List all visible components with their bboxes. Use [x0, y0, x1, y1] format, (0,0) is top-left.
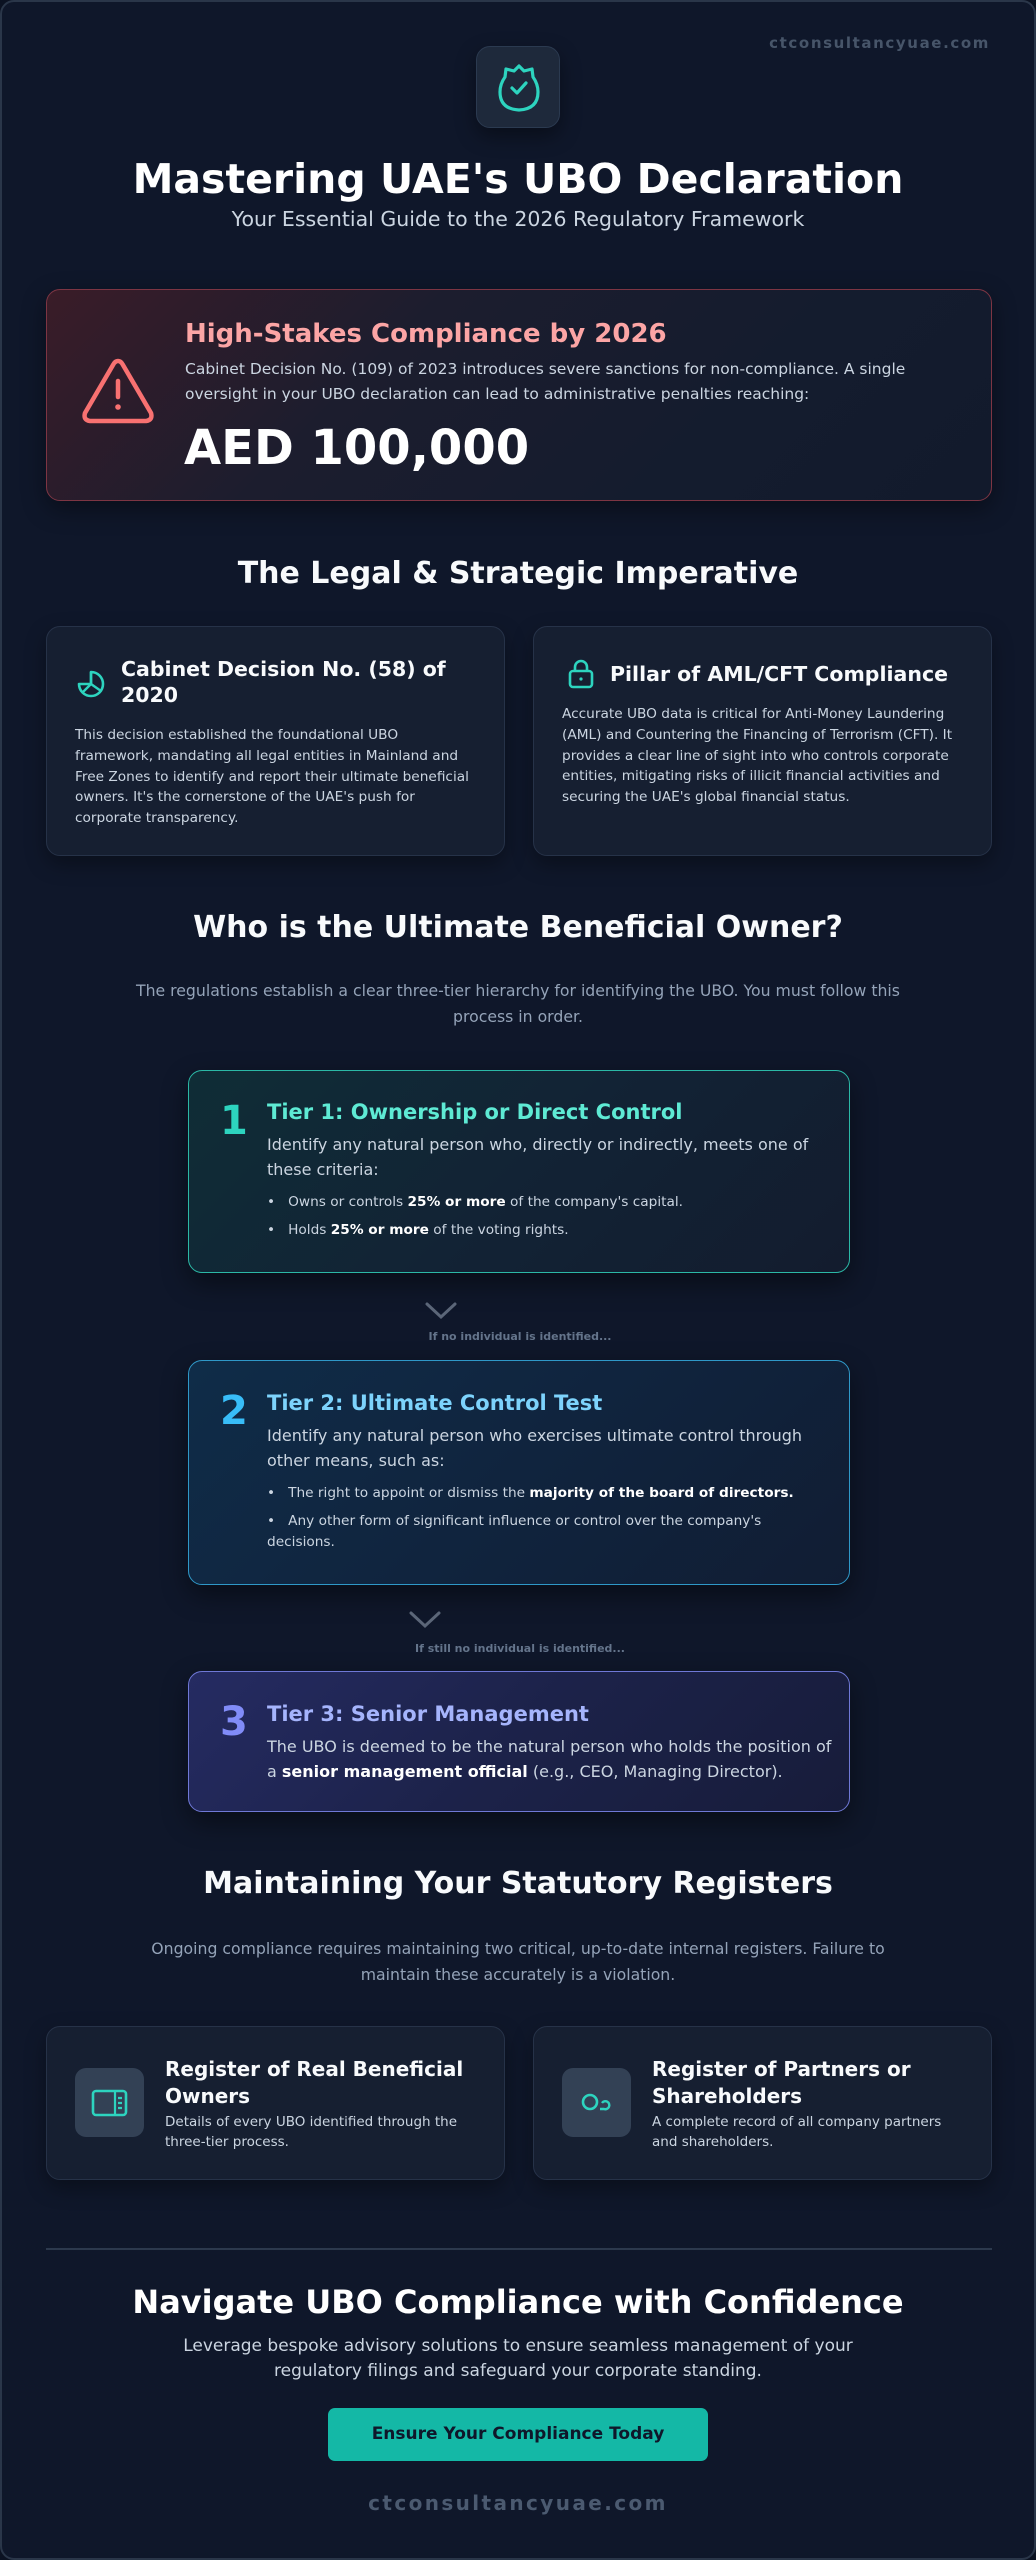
intro: registers: maintain these accurately is a violation.	[361, 1965, 675, 1984]
heading: Pillar of AML/CFT Compliance	[610, 662, 948, 686]
panel: register partners	[533, 2026, 992, 2180]
heading: registers: Maintaining Your Statutory Registers	[203, 1866, 833, 1901]
icon: pie	[78, 670, 104, 698]
tier 1 text	[267, 1100, 809, 1238]
tier 3 text	[266, 1702, 832, 1781]
body: This decision established the foundational UBO framework, mandating all legal entities in Mainland and Free Zones to identify and report their ultimate beneficial owners. It's the cornerstone of the UAE's push for corporate transparency.	[75, 727, 469, 826]
panel: alert	[46, 289, 992, 501]
heading: Cabinet Decision No. (58) of 2020	[121, 657, 446, 707]
CTA text: Leverage bespoke advisory solutions to ensure seamless management of your	[183, 2336, 853, 2356]
tier 1 text: • Holds 25% or more of the voting rights.	[267, 1222, 569, 1238]
tier 2 text	[267, 1391, 802, 1550]
tier 2 text: Tier 2: Ultimate Control Test	[267, 1391, 602, 1415]
heading: who is UBO: Who is the Ultimate Beneficial Owner?	[193, 910, 843, 945]
alert body	[185, 360, 905, 403]
register body: and shareholders.	[652, 2134, 773, 2150]
tier 1 text: • Owns or controls 25% or more of the company's capital.	[267, 1194, 683, 1210]
intro: registers: Ongoing compliance requires maintaining two critical, up-to-date internal registers. Failure to	[151, 1939, 885, 1958]
register body	[652, 2114, 941, 2150]
register title: Register of Real Beneficial Owners	[165, 2057, 463, 2108]
footer url: ctconsultancyuae.com	[368, 2491, 668, 2515]
icon: register	[75, 2068, 144, 2137]
tier 3 text: The UBO is deemed to be the natural person who holds the position of	[267, 1737, 831, 1756]
tier 2 text: • Any other form of significant influence or control over the company's decisions.	[267, 1513, 761, 1550]
tier 3 text: Tier 3: Senior Management	[267, 1702, 589, 1726]
alert heading: High-Stakes Compliance by 2026	[185, 319, 667, 349]
panel: AML/CFT	[533, 626, 992, 856]
step note 1: If no individual is identified...	[428, 1330, 611, 1343]
title: Mastering UAE's UBO Declaration	[133, 155, 903, 203]
CTA text: regulatory filings and safeguard your corporate standing.	[274, 2361, 762, 2381]
icon: partners	[562, 2068, 631, 2137]
button: Ensure Your Compliance Today	[372, 2424, 664, 2444]
panel: cabinet decision 58	[46, 626, 505, 856]
register body	[165, 2114, 457, 2150]
panel: tier 3	[188, 1671, 850, 1812]
tier 2 text: Identify any natural person who exercises ultimate control through other means, such as:	[267, 1426, 802, 1470]
register body: A complete record of all company partners	[652, 2114, 941, 2130]
icon: shield check	[476, 46, 560, 128]
panel: tier 2	[188, 1360, 850, 1585]
number 1: 1	[220, 1098, 248, 1144]
intro: registers	[151, 1939, 885, 1984]
tier 1 text: Tier 1: Ownership or Direct Control	[267, 1100, 682, 1124]
penalty figure: AED 100,000	[184, 420, 529, 476]
panel: tier 1	[188, 1070, 850, 1273]
step note 2: If still no individual is identified...	[415, 1642, 625, 1655]
panel: register UBO	[46, 2026, 505, 2180]
tier 3 text: a senior management official (e.g., CEO, Managing Director).	[267, 1762, 783, 1781]
register title: Register of Partners or Shareholders	[652, 2057, 911, 2108]
heading: CTA: Navigate UBO Compliance with Confidence	[132, 2283, 904, 2321]
button	[328, 2408, 708, 2461]
arrow: chevron 2	[410, 1611, 440, 1628]
intro: hierarchy: process in order.	[453, 1007, 583, 1026]
register body: three-tier process.	[165, 2134, 289, 2150]
alert body: oversight in your UBO declaration can lead to administrative penalties reaching:	[185, 385, 809, 403]
intro: hierarchy: The regulations establish a clear three-tier hierarchy for identifying the UBO. You must follow this	[136, 981, 900, 1000]
body: Accurate UBO data is critical for Anti-Money Laundering (AML) and Countering the Financing of Terrorism (CFT). It provides a clear line of sight into who controls corporate entities, mitigating risks of illicit financial activities and securing the UAE's global financial status.	[562, 706, 952, 805]
CTA text	[183, 2336, 853, 2381]
heading: legal: The Legal & Strategic Imperative	[238, 556, 798, 591]
arrow: chevron 1	[426, 1302, 456, 1319]
icon: lock	[568, 660, 594, 688]
alert body: Cabinet Decision No. (109) of 2023 introduces severe sanctions for non-compliance. A single	[185, 360, 905, 378]
register body: Details of every UBO identified through the	[165, 2114, 457, 2130]
intro: hierarchy	[136, 981, 900, 1026]
tier 1 text: Identify any natural person who, directly or indirectly, meets one of these criteria:	[267, 1135, 808, 1179]
number 2: 2	[220, 1388, 248, 1434]
tier 2 text: • The right to appoint or dismiss the majority of the board of directors.	[267, 1485, 794, 1501]
subtitle: Your Essential Guide to the 2026 Regulatory Framework	[232, 207, 804, 231]
watermark top: ctconsultancyuae.com	[769, 34, 990, 52]
icon: warning	[82, 358, 154, 424]
number 3: 3	[220, 1699, 248, 1745]
